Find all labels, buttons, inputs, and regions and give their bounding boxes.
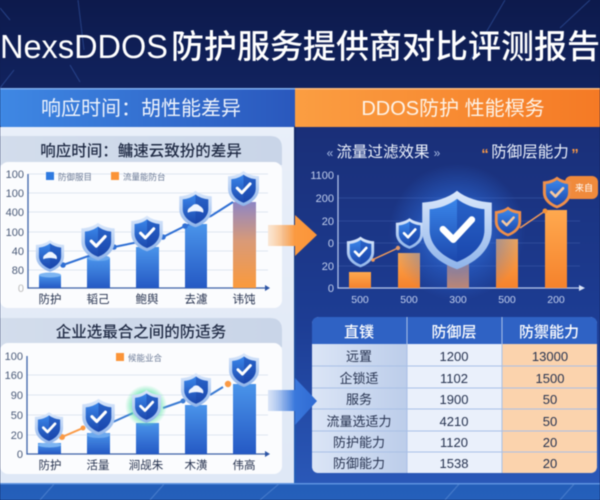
right panel background	[296, 127, 600, 483]
category labels: 伟高	[232, 458, 256, 472]
table rows: 1120	[440, 435, 468, 450]
small shields	[347, 207, 521, 267]
x labels: 500	[498, 294, 516, 306]
panel: left performance	[0, 88, 295, 483]
left header band: 响应时间：胡性能差异	[41, 97, 241, 120]
table rows	[326, 349, 568, 471]
y axis labels: 40	[12, 246, 24, 258]
arrow: orange to right chart	[268, 215, 317, 256]
table rows: 1538	[440, 456, 468, 471]
table rows: 流量选适力	[326, 414, 392, 429]
trend line	[59, 381, 231, 440]
card title band	[0, 136, 282, 165]
panel: right bar chart	[310, 143, 598, 306]
chart headings	[327, 143, 579, 163]
panel: response time chart	[0, 136, 282, 308]
legend	[46, 172, 166, 182]
table rows: 13000	[532, 349, 568, 364]
category labels: 防护	[38, 292, 62, 306]
table rows: 50	[543, 414, 557, 429]
bars	[349, 210, 567, 288]
bars	[38, 384, 256, 454]
y axis labels: 90	[11, 390, 23, 402]
card title band	[0, 318, 282, 347]
trend line	[60, 202, 233, 268]
panel: enterprise choice chart	[0, 318, 282, 474]
trend lines	[371, 208, 548, 262]
category labels: 涧觇朱	[129, 458, 164, 472]
chart headings: ”	[571, 146, 579, 163]
y axis labels: 80	[12, 265, 24, 277]
table rows: 远置	[346, 349, 372, 364]
y axis labels: 100	[5, 351, 23, 363]
table rows: 防御能力	[333, 456, 385, 471]
title: 防护服务提供商对比评测报告	[171, 28, 600, 65]
y axis labels	[6, 169, 24, 295]
table header: 直镤	[344, 324, 374, 341]
y axis labels: 1100	[310, 170, 334, 182]
category labels: 去濾	[184, 292, 208, 306]
title: NexsDDOS	[0, 28, 168, 65]
y axis labels: 400	[6, 207, 24, 219]
shield on tag	[543, 177, 571, 208]
legend: 流量能防台	[123, 172, 166, 182]
chart headings: «	[327, 146, 334, 160]
table rows: 1200	[440, 349, 468, 364]
y axis labels: 0	[17, 449, 23, 461]
y axis labels: 20	[322, 261, 334, 273]
y axis labels	[310, 170, 334, 295]
y axis labels: 50	[11, 410, 23, 422]
category labels: 防护	[38, 458, 62, 472]
table rows: 20	[543, 435, 557, 450]
table header	[344, 324, 579, 341]
category labels: 讳饨	[232, 293, 256, 306]
shield icons	[36, 171, 259, 272]
table header: 防禦能力	[519, 324, 579, 341]
card title band: 响应时间：鳙速云致扮的差异	[40, 141, 242, 160]
y axis labels: 100	[6, 227, 24, 239]
callout tag: 来自	[575, 182, 593, 193]
comparison table	[312, 317, 597, 473]
category labels: 木潢	[184, 459, 208, 472]
category labels: 鲍舆	[136, 292, 158, 306]
category labels: 活量	[86, 458, 110, 472]
category labels	[38, 292, 256, 306]
chart headings: 防御层能力	[491, 143, 569, 161]
panel: right performance	[295, 88, 600, 483]
table rows: 企锁适	[339, 371, 379, 386]
y axis labels: 160	[5, 370, 23, 382]
table rows: 50	[543, 392, 557, 407]
table rows: 防护能力	[333, 435, 385, 450]
table rows: 4210	[440, 414, 468, 429]
category labels	[38, 458, 256, 472]
card title band: 企业选最合之间的防适务	[56, 322, 226, 341]
left header band	[0, 88, 295, 127]
y axis labels: 0	[18, 283, 24, 295]
chart headings: 流量过滤效果	[336, 143, 430, 161]
y axis labels	[5, 351, 23, 461]
x labels: 300	[449, 294, 467, 306]
x labels	[351, 294, 565, 306]
table rows: 1900	[440, 392, 468, 407]
arrow: blue to table	[268, 378, 317, 425]
table rows: 20	[543, 456, 557, 471]
y axis labels: 20	[11, 430, 23, 442]
left panel background	[0, 127, 294, 483]
large shield	[422, 191, 492, 269]
table rows: 1500	[536, 371, 564, 386]
table rows: 1102	[440, 371, 468, 386]
y axis labels: 0	[328, 283, 334, 295]
right header band	[295, 88, 600, 127]
table rows: 服务	[346, 392, 372, 407]
bars	[39, 202, 256, 288]
y axis labels: 0	[328, 238, 334, 250]
legend: 防御服目	[58, 172, 92, 182]
bottom strip	[0, 483, 600, 484]
y axis labels: 100	[6, 188, 24, 200]
y axis labels: 200	[316, 193, 334, 205]
chart headings: “	[481, 146, 489, 163]
category labels: 韬己	[86, 293, 110, 306]
y axis labels: 20	[322, 216, 334, 228]
x labels: 500	[351, 294, 369, 306]
table header: 防御层	[431, 324, 477, 341]
callout tag	[565, 176, 598, 199]
legend: 候能业合	[128, 353, 163, 363]
x labels: 500	[400, 294, 418, 306]
shield icons	[35, 353, 259, 444]
y axis labels: 100	[6, 169, 24, 181]
x labels: 200	[547, 294, 565, 306]
chart headings: »	[434, 146, 441, 160]
right header band: DDOS防护 性能榠务	[361, 97, 545, 120]
central glow	[389, 164, 525, 300]
